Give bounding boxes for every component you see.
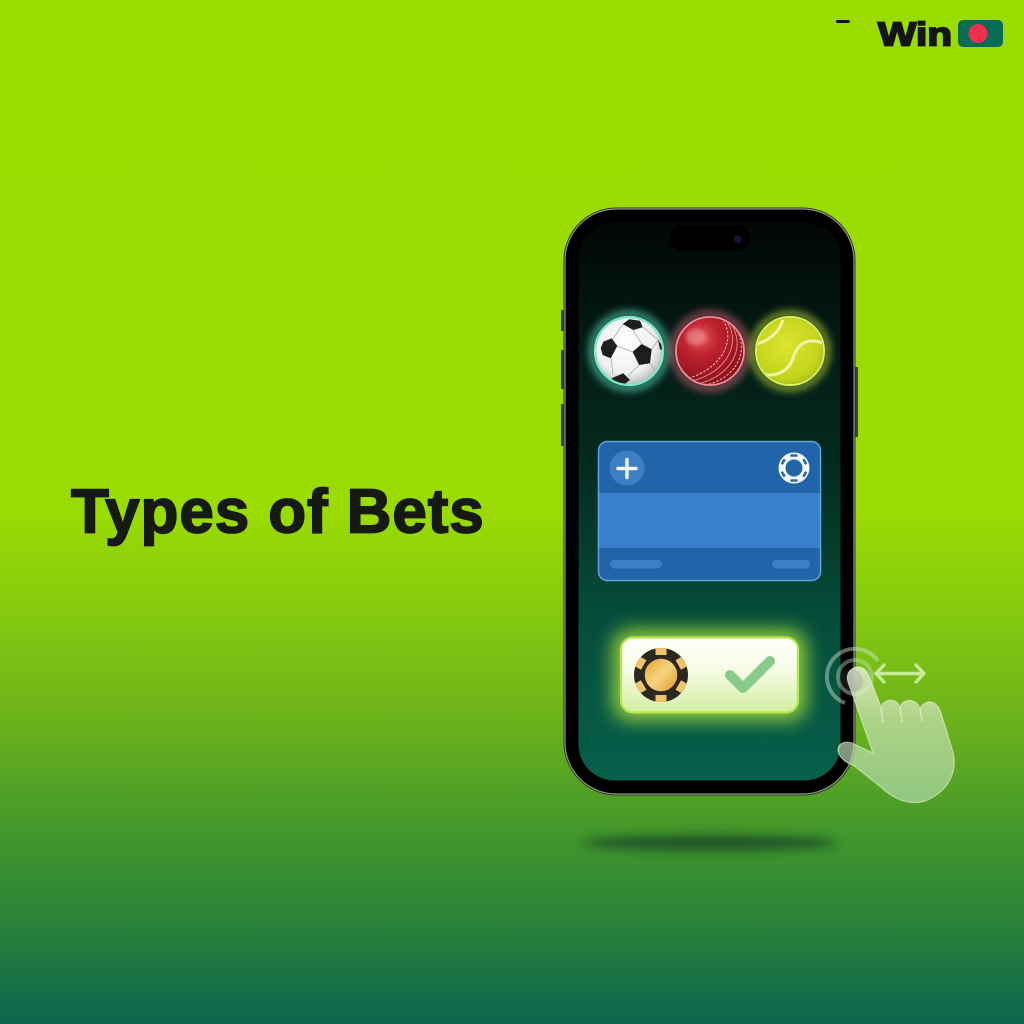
logo: Win with flag xyxy=(836,16,1003,52)
icon: poker chip xyxy=(778,452,810,484)
phone body xyxy=(564,208,856,796)
placeholder bar right xyxy=(772,560,810,568)
seam lines xyxy=(611,324,660,378)
icon: plus button xyxy=(610,450,644,486)
finger lines xyxy=(881,707,922,723)
hand shape xyxy=(838,667,954,803)
dynamic island camera xyxy=(670,226,750,251)
phone screen xyxy=(578,222,840,780)
icon: cricket ball xyxy=(673,314,747,388)
tap ripple xyxy=(827,649,878,703)
icon: tennis ball xyxy=(753,314,827,388)
icon: check mark xyxy=(730,661,770,688)
phone xyxy=(561,208,858,796)
black panels xyxy=(601,319,664,385)
gesture hand xyxy=(827,649,954,803)
icon: soccer ball xyxy=(592,314,666,388)
side buttons xyxy=(561,310,858,446)
card body xyxy=(598,441,821,581)
bet card xyxy=(598,441,821,581)
confirm button xyxy=(612,629,807,721)
phone shadow xyxy=(582,835,838,851)
icon: Bangladesh flag xyxy=(958,20,1003,47)
placeholder bar left xyxy=(610,560,662,568)
title: Types of Bets xyxy=(71,478,485,546)
logo: Win with flag: Win xyxy=(878,16,952,52)
icon: gold chip xyxy=(634,648,688,702)
swipe arrow xyxy=(876,665,924,682)
